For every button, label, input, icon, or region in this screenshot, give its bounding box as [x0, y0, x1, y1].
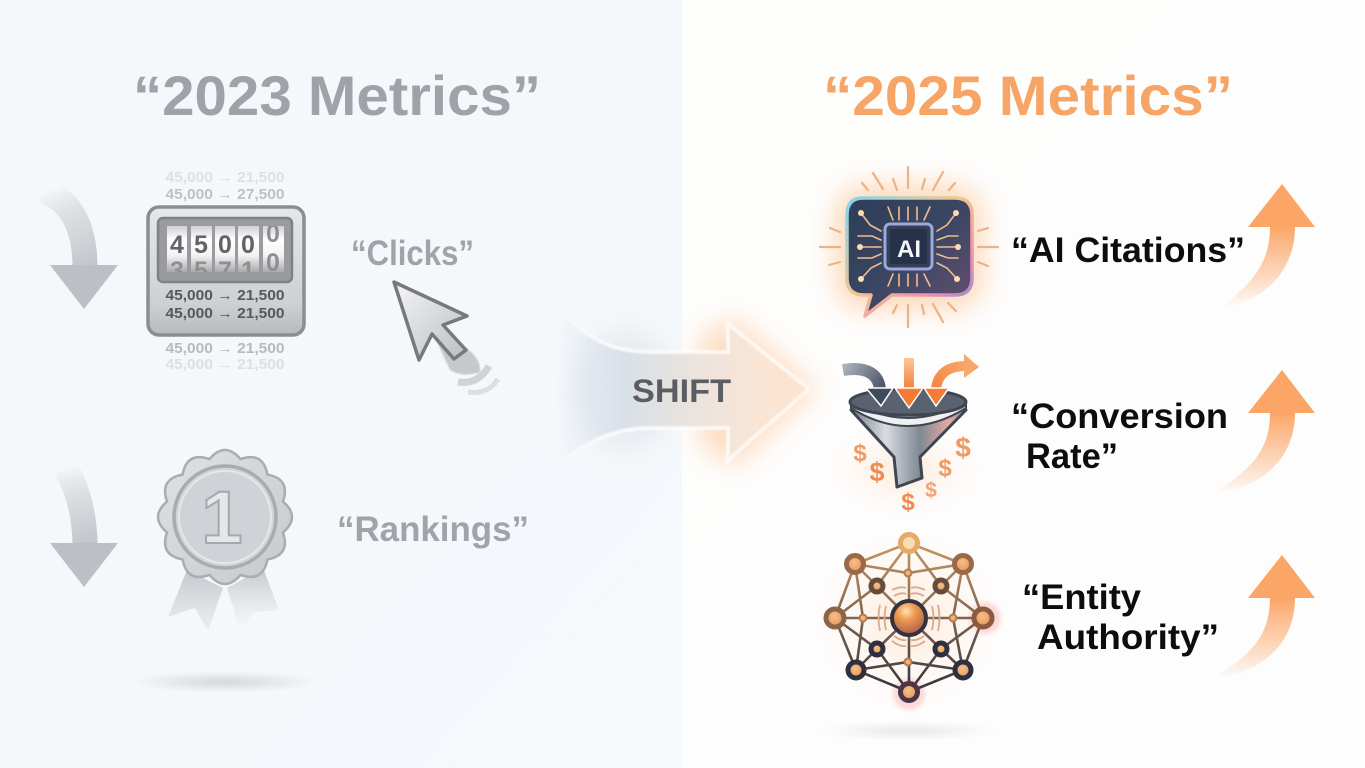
- label: Conversion Rate: Rate”: [1026, 437, 1118, 476]
- central node: [892, 601, 926, 635]
- bubble: [847, 198, 972, 316]
- arrow outline: [557, 313, 809, 463]
- label: Conversion Rate: “Conversion: [1011, 397, 1228, 436]
- icon: ranking medal: [158, 450, 292, 631]
- label: Rankings: “Rankings”: [337, 510, 529, 549]
- ribbons: [168, 568, 279, 631]
- AI chip: [885, 224, 932, 269]
- icon: down arrow for rankings: [50, 468, 118, 587]
- icon: entity network: [813, 528, 1003, 712]
- counter reels: 0: [218, 231, 232, 259]
- icon: conversion funnel: [827, 354, 983, 518]
- counter reels: [167, 226, 284, 272]
- glow: [835, 185, 983, 310]
- counter reels: 7: [218, 257, 232, 285]
- dollar signs: [853, 432, 971, 516]
- signal arcs: [878, 587, 940, 646]
- numbers on plate: [166, 287, 284, 322]
- icon: up arrow for conversion rate: [1212, 370, 1315, 494]
- ground shadow left: [130, 671, 320, 693]
- circuit traces: [858, 207, 958, 286]
- title: 2025 Metrics: “2025 Metrics”: [823, 64, 1233, 127]
- faded number rows above: [166, 169, 284, 203]
- left halo: [606, 334, 656, 446]
- label: Conversion Rate: [1011, 397, 1228, 476]
- title: 2023 Metrics: “2023 Metrics”: [133, 64, 541, 127]
- counter reels: 0: [241, 231, 255, 259]
- icon: mouse cursor: [394, 282, 498, 392]
- medal numeral: 1: [201, 476, 243, 559]
- icon: AI chat bubble: [820, 167, 998, 327]
- arrow: SHIFT: [557, 313, 818, 466]
- funnel rim: [851, 402, 966, 426]
- motion trail: [436, 340, 498, 392]
- panel: 2025 background: [682, 0, 1365, 768]
- funnel body: [851, 410, 966, 487]
- label: Entity Authority: Authority”: [1037, 618, 1219, 657]
- panel: 2023 background: [0, 0, 682, 768]
- dollar signs: $: [938, 455, 952, 482]
- counter reels: 0: [266, 249, 280, 277]
- dollar signs: $: [901, 489, 915, 516]
- dollar signs: $: [955, 432, 971, 463]
- dollar signs: $: [869, 457, 885, 487]
- label: Entity Authority: [1022, 578, 1219, 657]
- input arrow orange: [904, 358, 914, 389]
- icon: AI chat bubble: AI: [897, 236, 921, 263]
- faded number rows above: 45,000 → 21,500: [166, 169, 284, 186]
- network links: [835, 543, 983, 692]
- icon: odometer counter: [148, 169, 304, 373]
- arrow body: [557, 313, 809, 463]
- glow: [813, 528, 1003, 712]
- icon: up arrow for AI citations: [1220, 184, 1315, 308]
- label: Clicks: “Clicks”: [351, 234, 474, 273]
- counter reels: 1: [241, 257, 255, 285]
- faded number rows above: 45,000 → 27,500: [166, 186, 284, 203]
- input arrow gray: [843, 369, 880, 392]
- output arrow orange: [936, 366, 966, 392]
- counter plate: [148, 207, 304, 335]
- counter reels: 4: [170, 231, 184, 259]
- icon: up arrow for entity authority: [1212, 555, 1315, 679]
- dollar signs: $: [853, 440, 867, 467]
- glow: [827, 422, 983, 518]
- counter reels: 0: [266, 220, 280, 248]
- label: Entity Authority: “Entity: [1022, 578, 1142, 617]
- rays: [820, 167, 998, 327]
- counter window: [158, 218, 292, 282]
- dollar signs: $: [925, 479, 937, 502]
- faded number rows below: 45,000 → 21,500: [166, 356, 284, 373]
- counter reels: 5: [194, 231, 208, 259]
- faded number rows below: 45,000 → 21,500: [166, 340, 284, 357]
- network nodes: [826, 534, 992, 700]
- circuit nodes: [857, 210, 961, 282]
- arrow label: SHIFT: [632, 373, 731, 409]
- medal face: [174, 466, 276, 568]
- rosette: [158, 450, 292, 584]
- numbers on plate: 45,000 → 21,500: [166, 305, 284, 322]
- label: AI Citations: “AI Citations”: [1011, 231, 1245, 270]
- icon: down arrow for clicks: [42, 190, 118, 309]
- numbers on plate: 45,000 → 21,500: [166, 287, 284, 304]
- arrow glow: [700, 318, 818, 466]
- ground shadow right: [818, 721, 998, 741]
- counter reels: 3: [170, 257, 184, 285]
- counter reels: 5: [194, 257, 208, 285]
- faded number rows below: [166, 340, 284, 373]
